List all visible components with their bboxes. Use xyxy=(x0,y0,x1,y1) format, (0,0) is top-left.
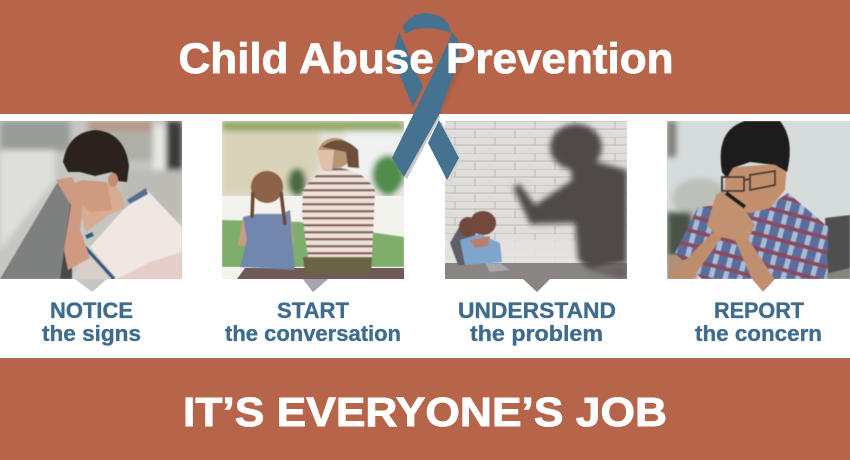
photo: boy hiding his face xyxy=(0,121,182,293)
title: Child Abuse Prevention xyxy=(178,36,674,83)
photo: boy on the phone xyxy=(667,121,850,293)
label: notice the signs: NOTICE xyxy=(50,298,133,323)
label: understand the problem xyxy=(458,298,616,346)
label: notice the signs xyxy=(42,298,141,346)
label: report the concern: REPORT xyxy=(714,298,805,323)
icon: awareness ribbon xyxy=(392,13,462,182)
label: start the conversation: the conversation xyxy=(225,321,401,346)
label: report the concern xyxy=(695,298,822,346)
ribbon shadow xyxy=(432,60,465,115)
top banner xyxy=(0,0,850,114)
photo: woman and girl sitting xyxy=(222,121,404,293)
label: start the conversation xyxy=(225,298,401,346)
slogan: IT’S EVERYONE’S JOB xyxy=(183,389,667,435)
label: understand the problem: UNDERSTAND xyxy=(458,298,616,323)
bottom banner xyxy=(0,358,850,460)
photo: child crouching before a shadow xyxy=(445,121,627,293)
label: start the conversation: START xyxy=(277,298,350,323)
label: notice the signs: the signs xyxy=(42,321,141,346)
label: report the concern: the concern xyxy=(695,321,822,346)
label: understand the problem: the problem xyxy=(470,321,603,346)
